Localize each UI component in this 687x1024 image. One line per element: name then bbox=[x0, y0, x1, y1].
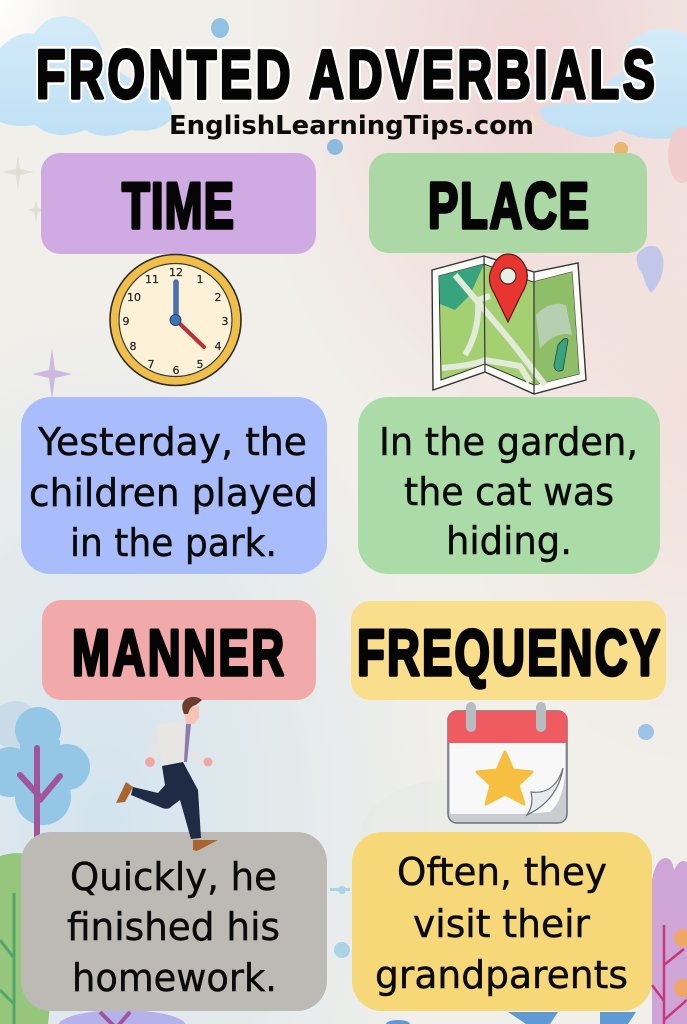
icon: clock: 3 bbox=[222, 315, 228, 328]
panel: place example: the cat was bbox=[404, 470, 614, 514]
decoration: blue leaves bbox=[386, 1012, 636, 1024]
icon: clock: 4 bbox=[214, 340, 222, 353]
icon: clock: 7 bbox=[148, 358, 154, 371]
panel: manner example: homework. bbox=[72, 956, 277, 1000]
decoration: lilac tree bbox=[58, 1010, 186, 1024]
panel: time example bbox=[21, 397, 327, 574]
decoration: cloud left bbox=[0, 16, 172, 136]
panel: manner heading bbox=[42, 600, 316, 700]
website subtitle: EnglishLearningTips.com bbox=[169, 111, 534, 141]
icon: clock: 6 bbox=[172, 364, 180, 377]
panel: time example: Yesterday, the bbox=[37, 420, 307, 464]
icon: calendar with star bbox=[448, 702, 567, 823]
decoration: middle sprigs bbox=[330, 886, 350, 958]
icon: clock: 12 bbox=[169, 266, 183, 279]
decoration: green tree bbox=[0, 853, 52, 1024]
panel: frequency example bbox=[352, 832, 652, 1011]
panel: place example bbox=[358, 397, 660, 574]
panel: place example: In the garden, bbox=[379, 420, 638, 464]
decoration: cloud right bbox=[540, 28, 687, 139]
panel: manner heading: MANNER bbox=[72, 616, 284, 689]
decoration: dots and sparkles bbox=[2, 18, 687, 740]
icon: clock bbox=[110, 254, 241, 386]
decoration: purple tree bbox=[652, 858, 687, 1024]
icon: map with pin bbox=[432, 254, 586, 394]
panel: place heading: PLACE bbox=[428, 169, 589, 242]
panel: place heading bbox=[369, 153, 647, 253]
icon: clock: 10 bbox=[127, 291, 141, 304]
decoration: blue tree bbox=[0, 701, 90, 840]
panel: manner example bbox=[21, 832, 327, 1011]
panel: frequency example: visit their bbox=[413, 902, 590, 946]
title halo: FRONTED ADVERBIALS bbox=[36, 35, 655, 113]
panel: time heading bbox=[41, 153, 316, 254]
icon: running man bbox=[116, 697, 218, 851]
panel: frequency heading: FREQUENCY bbox=[357, 616, 660, 689]
icon: clock: 9 bbox=[122, 315, 130, 328]
title: FRONTED ADVERBIALS bbox=[36, 35, 655, 113]
icon: clock: 5 bbox=[196, 358, 204, 371]
icon: clock: 2 bbox=[214, 291, 222, 304]
panel: frequency example: grandparents bbox=[375, 953, 628, 997]
panel: time heading: TIME bbox=[122, 169, 234, 242]
icon: clock: 11 bbox=[145, 273, 159, 286]
panel: manner example: Quickly, he bbox=[70, 855, 277, 899]
panel: place example: hiding. bbox=[446, 519, 572, 563]
panel: time example: in the park. bbox=[70, 521, 277, 565]
panel: manner example: finished his bbox=[67, 905, 280, 949]
icon: clock: 8 bbox=[130, 340, 136, 353]
panel: time example: children played bbox=[29, 471, 318, 515]
panel: frequency example: Often, they bbox=[397, 850, 607, 894]
icon: clock: 1 bbox=[196, 273, 204, 286]
